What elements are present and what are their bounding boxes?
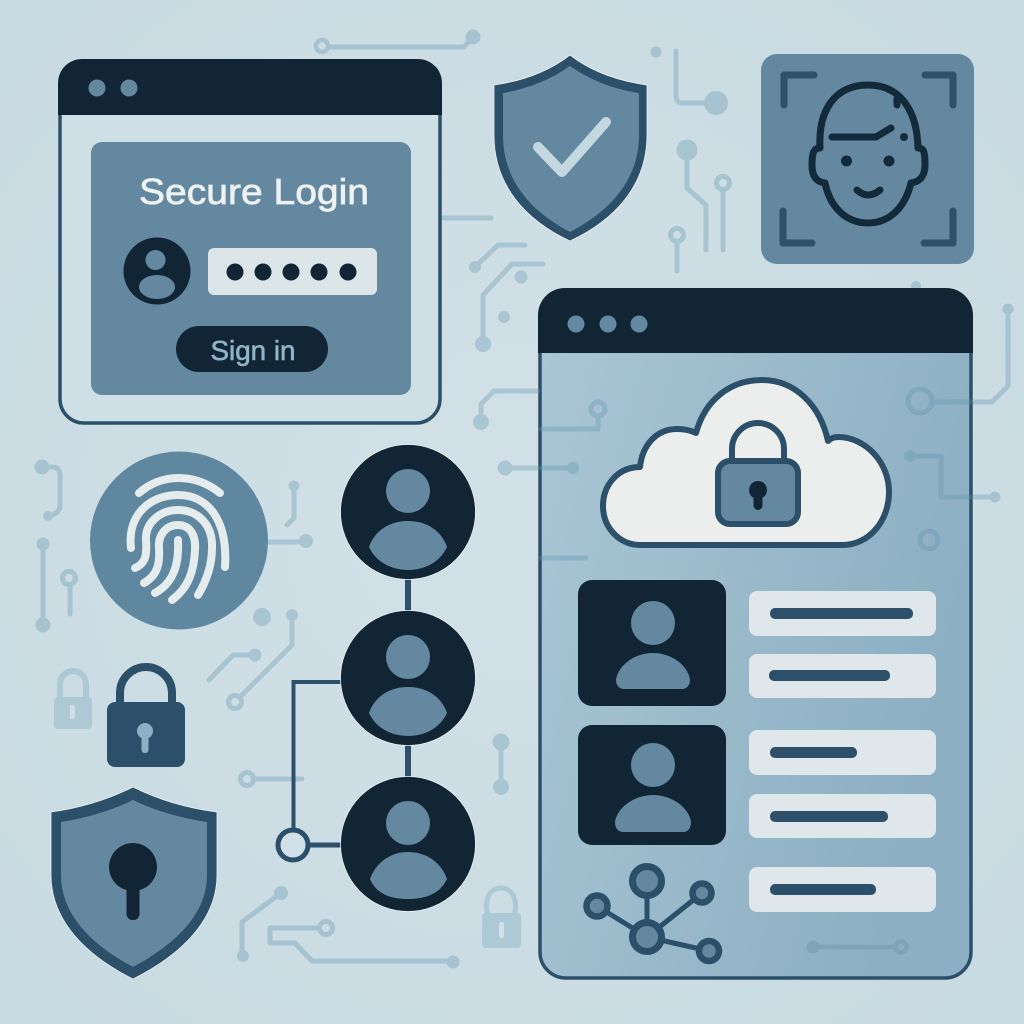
icon: face recognition tile (761, 54, 974, 264)
user node 2 (340, 610, 476, 746)
panel: main window body (540, 350, 971, 978)
icon: user avatar (124, 238, 190, 304)
sign in button: Sign in (210, 335, 296, 366)
panel: main window header (538, 288, 973, 353)
profile card 2 fields (749, 730, 936, 838)
small connector in window (806, 940, 906, 954)
profile card 1 fields (749, 591, 936, 698)
icon: keyhole shield (51, 787, 217, 979)
login card (91, 142, 411, 395)
heading: Secure Login: Secure Login (139, 171, 369, 212)
icon: faint padlock bottom (482, 888, 521, 948)
panel: secure login window (58, 59, 442, 423)
icon: fingerprint (90, 452, 268, 630)
profile card 2 avatar (578, 725, 726, 845)
profile card 1 avatar (578, 580, 726, 706)
face (812, 85, 925, 223)
icon: dark padlock (107, 667, 185, 767)
icon: cloud with padlock (603, 380, 889, 545)
user node 1 (340, 444, 476, 580)
window control dots (88, 80, 138, 96)
password field (208, 248, 377, 295)
bottom field (749, 867, 936, 912)
icon: shield with checkmark (494, 55, 647, 241)
user node 3 (340, 776, 476, 912)
scan brackets (783, 75, 953, 243)
icon: network nodes (586, 866, 719, 961)
icon: faint padlock (54, 671, 92, 729)
sign in button (176, 326, 328, 372)
user hierarchy connectors (278, 575, 408, 860)
